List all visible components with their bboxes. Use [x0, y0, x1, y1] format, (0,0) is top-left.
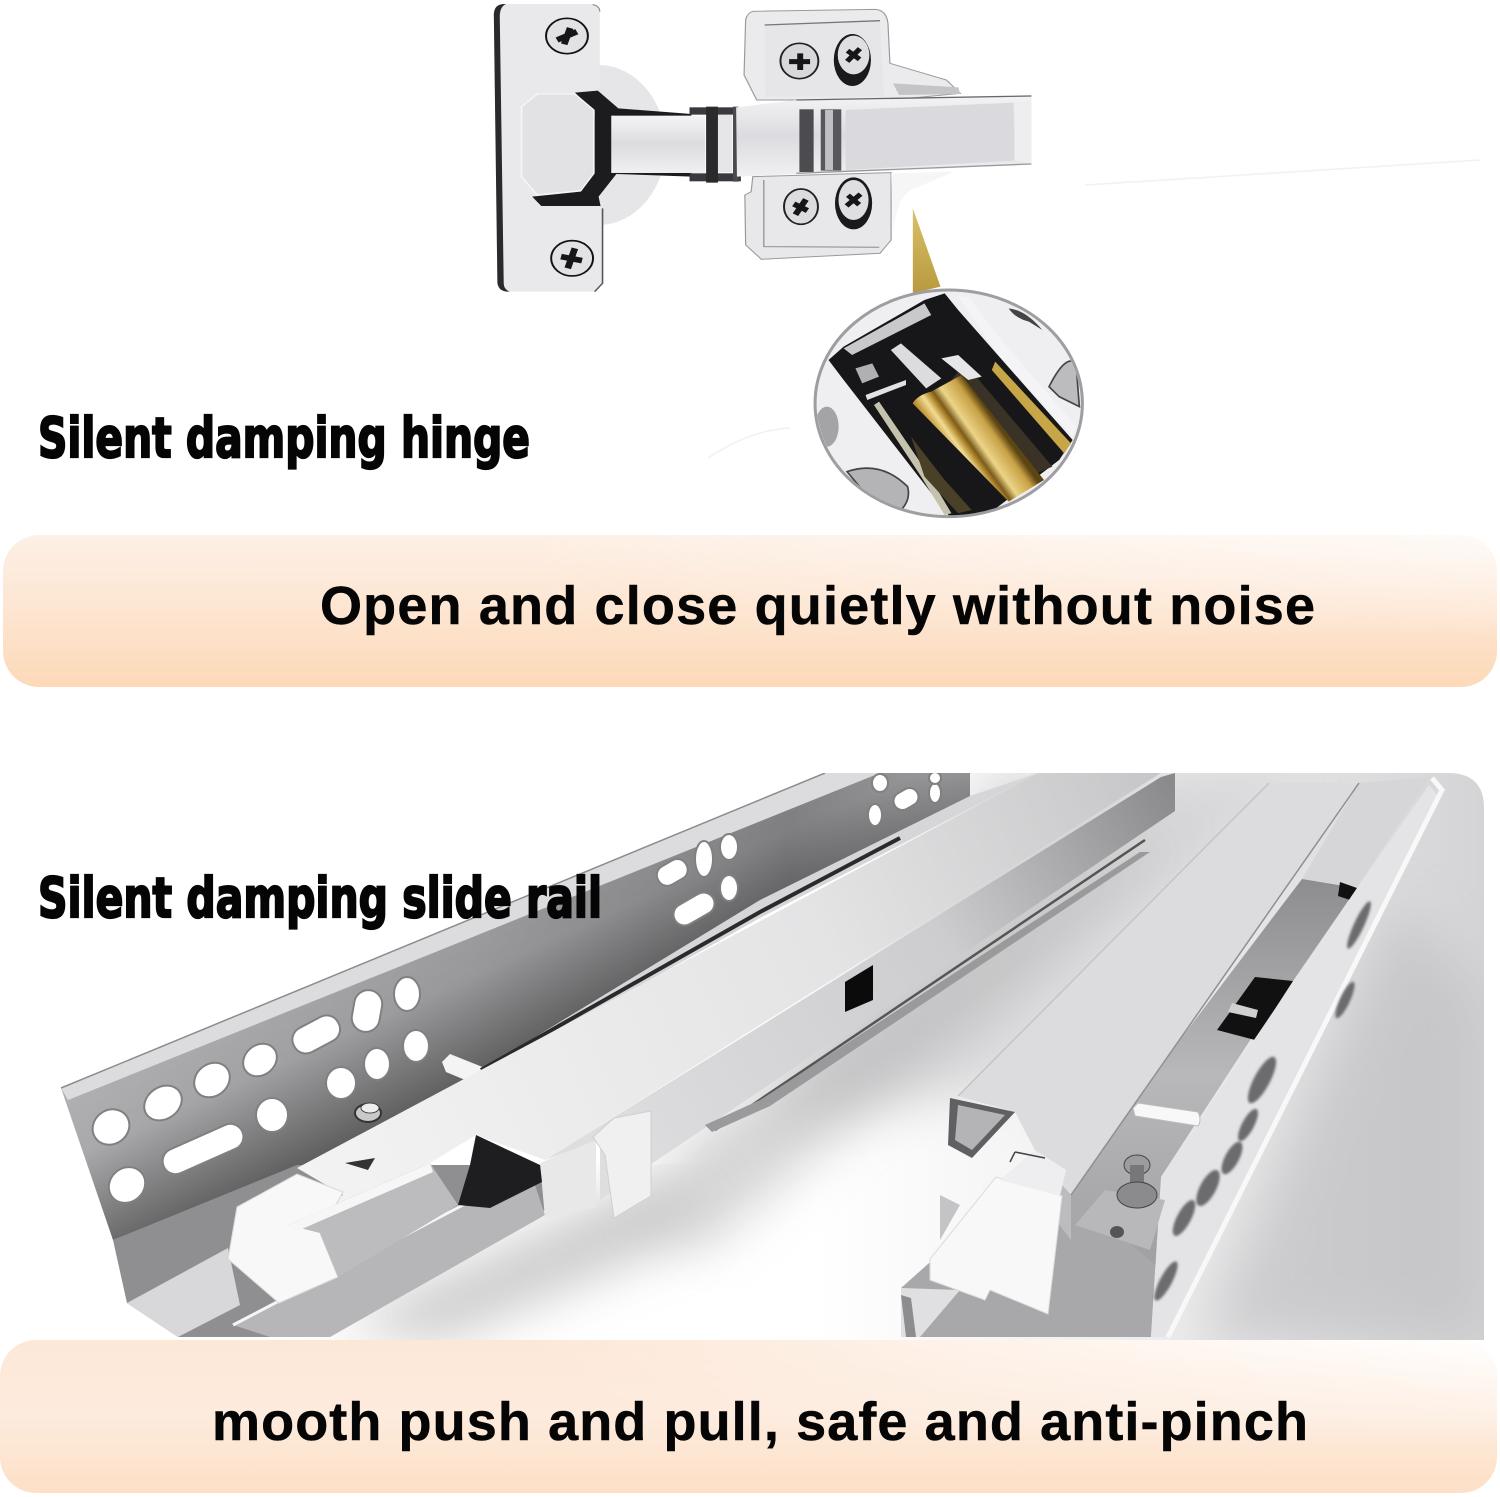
banner text: Open and close quietly without noise — [320, 576, 1315, 636]
banner: open and close quietly — [3, 535, 1497, 687]
left rail perforated plate — [61, 772, 970, 1240]
callout pointer — [913, 208, 941, 293]
hinge mounting disc — [531, 65, 666, 225]
back plate slots — [1150, 899, 1375, 1303]
right rail upper deck — [1302, 800, 1350, 884]
grey tab — [288, 1158, 458, 1277]
white damper end — [228, 1174, 343, 1303]
heading: silent damping hinge: Silent damping hinge — [38, 406, 530, 470]
hinge knuckle — [690, 107, 741, 183]
icon: concealed cabinet hinge — [494, 4, 1031, 293]
right rail body — [948, 783, 1359, 1240]
damper mechanism — [829, 293, 1076, 523]
lens pressings — [815, 308, 1079, 510]
heading: silent damping slide rail: Silent damping slide rail — [38, 866, 602, 930]
square slot — [845, 965, 873, 1012]
right slide rail — [901, 777, 1442, 1337]
gold damper cylinder — [913, 375, 1044, 502]
right rail back plate — [1150, 778, 1442, 1337]
hinge left mounting plate — [494, 4, 603, 292]
left slide rail — [61, 772, 1175, 1337]
banner: smooth push and pull — [0, 1340, 1497, 1493]
hinge arm — [522, 91, 705, 206]
floor shadows — [330, 773, 1484, 1340]
white pin — [442, 1054, 482, 1080]
damper mechanism — [1217, 882, 1357, 1040]
right rail gap — [1066, 879, 1357, 1270]
plate holes — [86, 772, 941, 1210]
faint background scratches — [708, 160, 1480, 458]
mounting bolt — [1075, 1155, 1165, 1250]
mounting screw — [355, 1103, 381, 1122]
panel: slide rail photo — [0, 772, 1484, 1340]
hinge right mounting plate — [744, 9, 960, 259]
right rail channel — [901, 1193, 1156, 1337]
white damper end — [930, 1177, 1062, 1314]
white pin — [1133, 1103, 1200, 1126]
banner text: mooth push and pull, safe and anti-pinch — [212, 1392, 1308, 1452]
left rail body — [288, 773, 1175, 1225]
gap between plate and rail — [534, 774, 1036, 1038]
white rail clip — [593, 1111, 651, 1218]
left rail tray — [113, 1165, 545, 1337]
screws — [546, 18, 872, 276]
icon: magnified hinge damper — [815, 290, 1082, 523]
hinge cup body — [736, 95, 1031, 177]
